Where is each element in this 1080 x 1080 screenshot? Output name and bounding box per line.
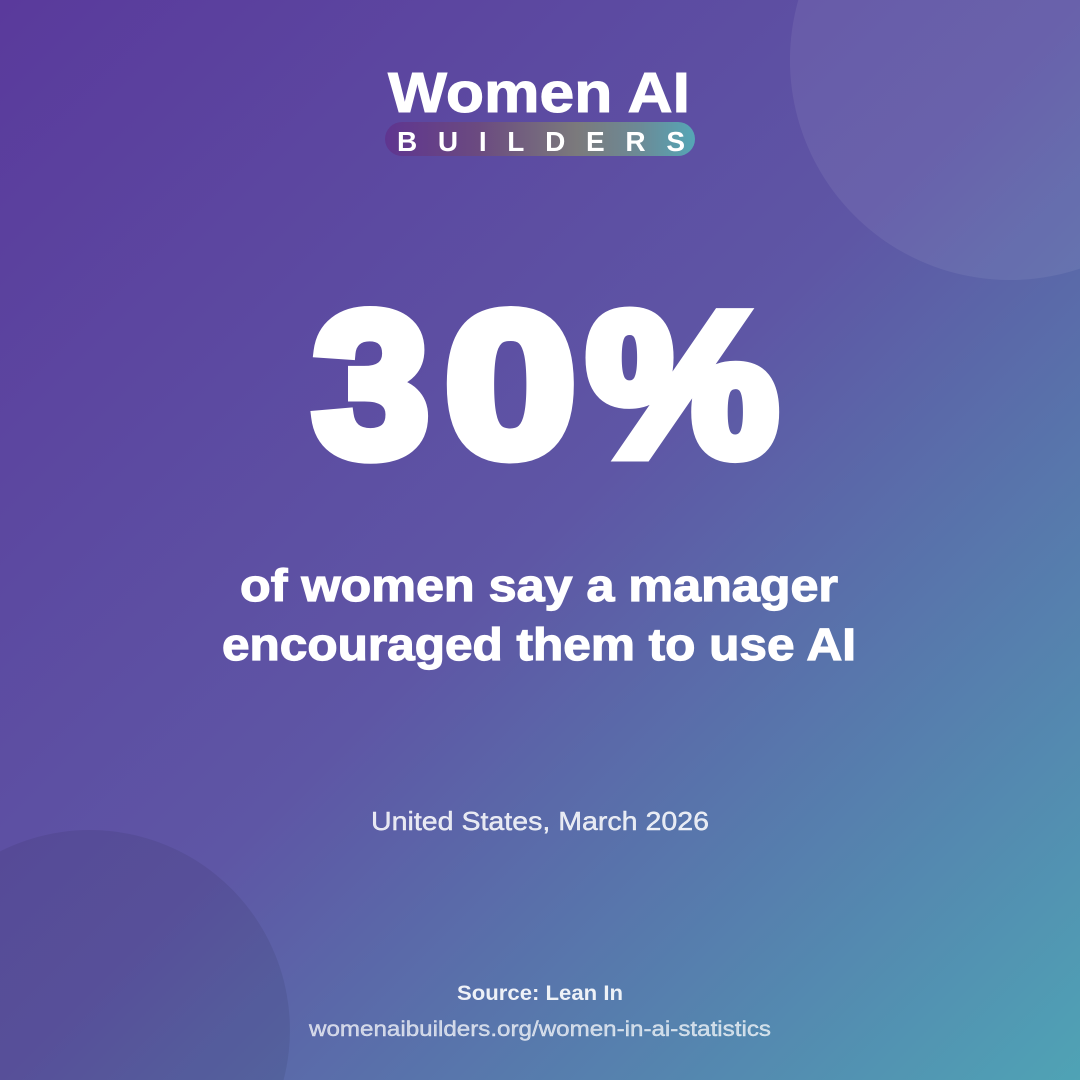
big statistic: 3 xyxy=(313,271,429,499)
big statistic: 0 xyxy=(445,271,576,499)
source url: womenaibuilders.org/women-in-ai-statistics xyxy=(308,1018,771,1041)
headline line 2: encouraged them to use AI xyxy=(222,619,856,670)
headline xyxy=(222,560,856,670)
big statistic: % xyxy=(587,271,778,499)
location and date: United States, March 2026 xyxy=(371,806,709,836)
logo pill xyxy=(385,122,695,156)
logo: Women AI Builders xyxy=(385,61,695,157)
decorative circle: bottom left xyxy=(0,830,290,1080)
decorative circle: top right xyxy=(790,0,1080,280)
logo pill text: BUILDERS xyxy=(397,126,685,157)
source: Source: Lean In xyxy=(457,981,623,1005)
headline line 1: of women say a manager xyxy=(240,560,838,611)
logo wordmark: Women AI xyxy=(388,61,690,125)
